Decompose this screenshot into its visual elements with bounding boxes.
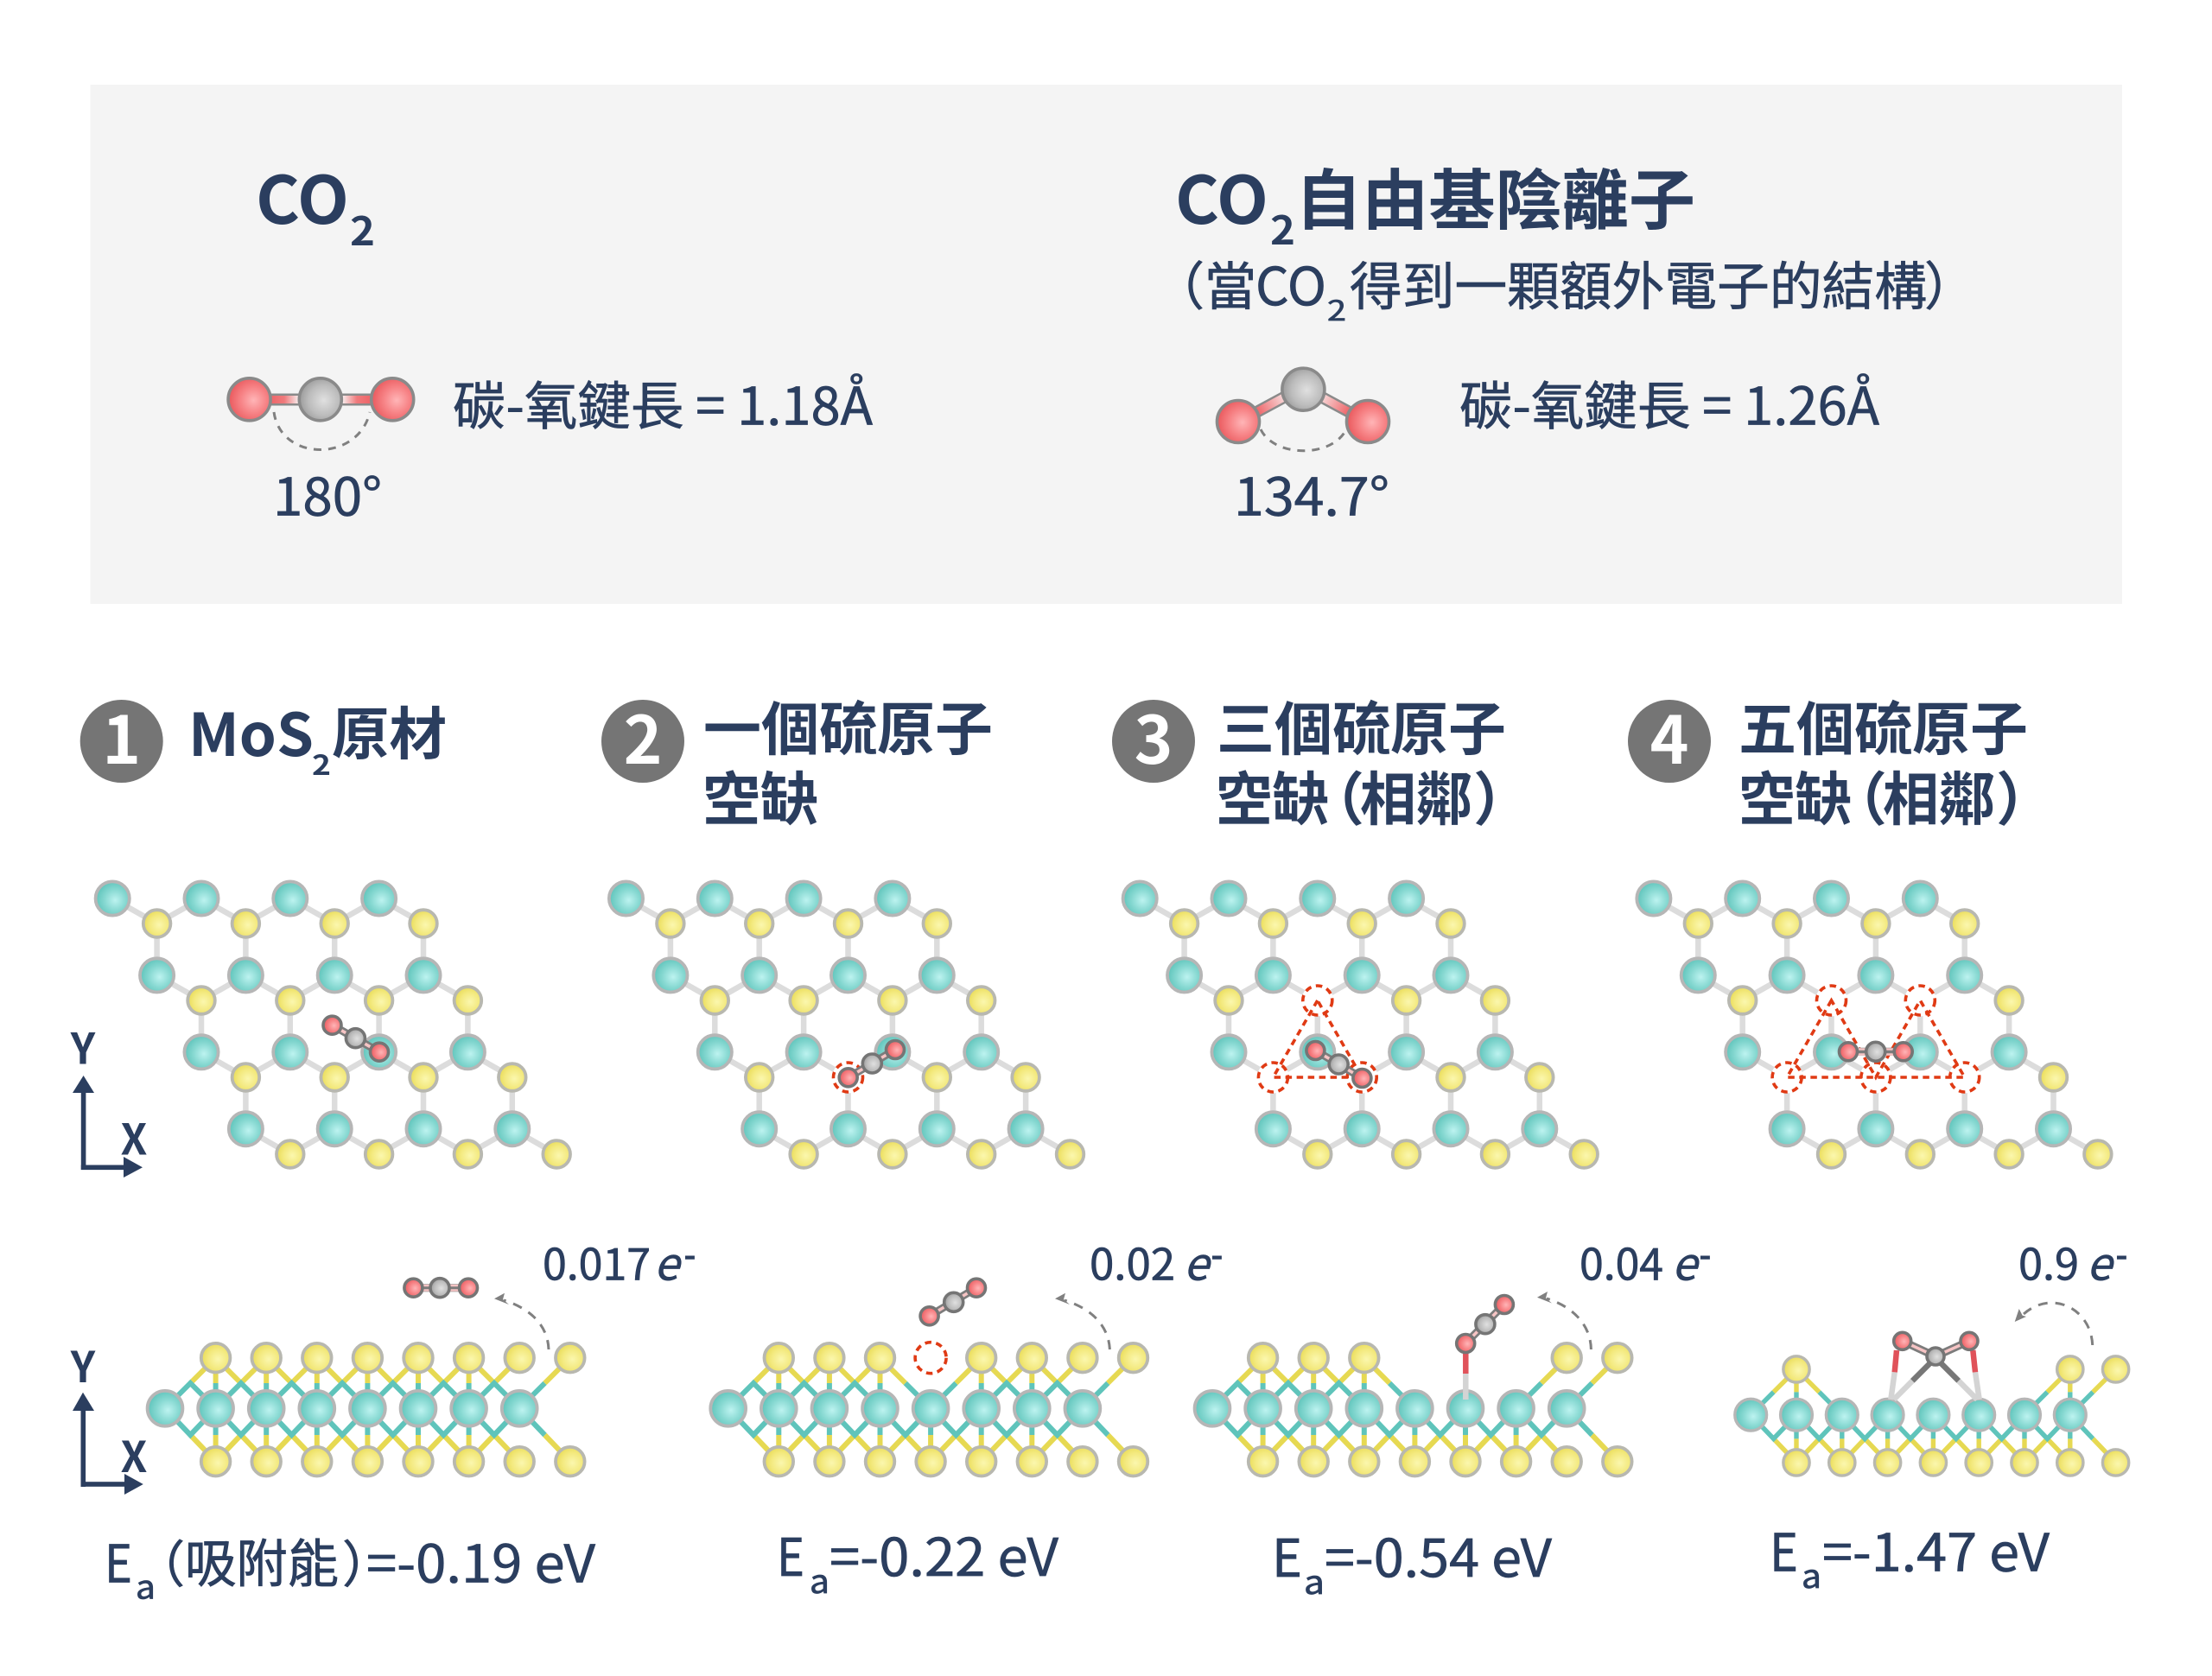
label: adsorption energy step 2: E [777,1516,804,1591]
side view: step 3 [1195,1343,1632,1476]
label: charge 0.017 e: 0.017 [543,1231,651,1293]
text: radical anion description: （ [1153,245,1205,321]
heading: step 2 one sulfur vacancy: 一個硫原子 [703,683,993,767]
badge: step 4 [1628,688,1711,783]
label: bond length 1.18: 碳-氧鍵長 = 1.18Å [453,365,874,441]
label: adsorption energy step 2: a [810,1555,830,1603]
axes: top view XY: Y [70,1016,96,1077]
text: radical anion description: ） [1924,245,1976,321]
axes: side view XY: Y [70,1334,96,1395]
label: adsorption energy step 1: E [105,1523,132,1598]
heading: step 3 three adjacent sulfur vacancies: 空缺 [1216,753,1329,837]
molecule: linear CO2 [228,378,414,449]
label: charge 0.017 e [543,1228,696,1293]
label: adsorption energy step 3: =-0.54 eV [1325,1517,1553,1592]
text: radical anion description [1153,245,1976,329]
heading: step 2 one sulfur vacancy: 空缺 [702,753,818,837]
label: bond length 1.26: 碳-氧鍵長 = 1.26Å [1459,365,1880,441]
label: charge 0.02 e [1090,1228,1224,1293]
badge: step 2: 2 [624,688,662,783]
heading: step 2 one sulfur vacancy [702,683,993,837]
label: charge 0.9 e: 0.9 [2018,1231,2079,1293]
label: charge 0.9 e [2018,1228,2128,1293]
label: adsorption energy step 1: a [136,1561,156,1609]
heading: CO2 radical anion: 2 [1270,200,1295,257]
text: radical anion description: CO [1255,245,1326,321]
label: adsorption energy step 3: E [1272,1517,1302,1592]
label: angle 180: 180° [273,456,382,531]
label: charge 0.02 e: e [1184,1228,1212,1293]
molecule: CO2 above step 1 [404,1279,477,1298]
label: charge 0.02 e: - [1211,1228,1224,1278]
heading: step 4 five adjacent sulfur vacancies: ） [1996,753,2054,837]
label: adsorption energy step 2: =-0.22 eV [830,1516,1059,1591]
heading: step 3 three adjacent sulfur vacancies [1216,683,1531,837]
heading: CO2 radical anion [1175,148,1695,257]
heading: CO2: 2 [350,200,375,257]
label: charge 0.017 e: - [683,1228,696,1278]
heading: step 1 pristine MoS2: 原材 [332,689,447,771]
label: angle 134.7: 134.7° [1234,456,1389,531]
heading: step 4 five adjacent sulfur vacancies: 空缺 [1738,753,1852,837]
label: adsorption energy step 4 [1770,1511,2050,1597]
heading: step 1 pristine MoS2: 2 [312,744,331,784]
panel: CO2 vs CO2 radical anion comparison [90,85,2122,604]
molecule: adsorbed CO2 top view [323,1016,389,1061]
badge: step 3 [1112,688,1195,783]
label: charge 0.04 e [1580,1228,1712,1293]
arrow: charge transfer step 1 [494,1293,549,1349]
badge: step 2 [601,688,684,783]
vacancy markers and triangles [1771,985,1980,1094]
heading: step 4 five adjacent sulfur vacancies: （ [1829,753,1887,837]
text: radical anion description: 得到一顆額外電子的結構 [1350,245,1927,321]
label: charge 0.04 e: 0.04 [1580,1231,1663,1293]
heading: step 1 pristine MoS2: MoS [188,688,314,773]
heading: step 3 three adjacent sulfur vacancies: 三個硫原子 [1217,683,1506,767]
heading: CO2 [256,148,375,257]
heading: CO2 radical anion: CO [1175,148,1268,243]
label: charge 0.04 e: - [1699,1228,1712,1278]
label: adsorption energy step 4: a [1802,1550,1821,1597]
top view: step 1 lattice [96,881,570,1168]
label: adsorption energy step 3: a [1304,1556,1325,1603]
label: adsorption energy step 4: E [1770,1511,1798,1586]
heading: step 4 five adjacent sulfur vacancies: 五個硫原子 [1738,683,2028,767]
badge: step 4: 4 [1650,688,1688,783]
text: radical anion description: 當 [1205,245,1256,321]
label: charge 0.017 e: e [654,1228,683,1293]
label: adsorption energy step 1: （ [135,1525,185,1597]
arrow: charge transfer step 3 [1537,1292,1591,1349]
molecule: adsorbed CO2 top view [839,1040,904,1087]
heading: step 3 three adjacent sulfur vacancies: 相鄰 [1360,753,1472,837]
label: adsorption energy step 1: 吸附能 [185,1523,339,1598]
label: adsorption energy step 3 [1272,1517,1553,1603]
vacancy markers and triangle [1257,985,1378,1094]
label: adsorption energy step 1: ） [342,1525,392,1597]
axes: top view XY: X [121,1107,148,1168]
heading: step 4 five adjacent sulfur vacancies [1738,683,2054,837]
label: charge 0.9 e: e [2087,1228,2115,1293]
molecule: adsorbed CO2 top view [1839,1042,1912,1061]
arrow: charge transfer step 2 [1055,1293,1109,1349]
axes: side view XY: X [121,1424,148,1485]
heading: step 3 three adjacent sulfur vacancies: （ [1306,753,1364,837]
badge: step 3: 3 [1135,688,1173,783]
side view: step 4 [1735,1356,2129,1476]
molecule: CO2 bound at step 3 [1457,1296,1513,1400]
top view: step 3 lattice with three vacancies [1123,881,1598,1168]
label: adsorption energy step 2 [777,1516,1059,1603]
badge: step 1 [80,688,163,783]
side view: step 1 [148,1343,585,1476]
heading: step 4 five adjacent sulfur vacancies: 相鄰 [1883,753,1995,837]
label: adsorption energy step 1 [105,1523,596,1609]
side view: step 2 [710,1343,1147,1476]
label: adsorption energy step 1: =-0.19 eV [366,1523,596,1598]
badge: step 1: 1 [102,688,141,783]
top view: step 2 lattice with one vacancy [609,881,1084,1168]
label: adsorption energy step 4: =-1.47 eV [1822,1511,2050,1586]
molecule: CO2 above step 2 [920,1279,985,1325]
heading: CO2: CO [256,148,349,243]
axes: top view XY [70,1016,148,1178]
vacancy marker [832,1061,864,1094]
molecule: bent CO2 bound at step 4 [1891,1332,1980,1400]
label: charge 0.04 e: e [1672,1228,1700,1293]
label: charge 0.9 e: - [2115,1228,2128,1278]
label: charge 0.02 e: 0.02 [1090,1231,1175,1293]
heading: step 3 three adjacent sulfur vacancies: ） [1473,753,1531,837]
heading: CO2 radical anion: 自由基陰離子 [1295,148,1695,243]
top view: step 4 lattice with five vacancies [1637,881,2112,1168]
molecule: bent CO2 radical anion [1217,368,1389,451]
axes: side view XY [70,1334,148,1495]
heading: step 1 pristine MoS2 [188,688,447,784]
arrow: charge transfer step 4 [2015,1303,2093,1345]
molecule: adsorbed CO2 top view [1306,1042,1371,1087]
text: radical anion description: 2 [1327,289,1346,329]
